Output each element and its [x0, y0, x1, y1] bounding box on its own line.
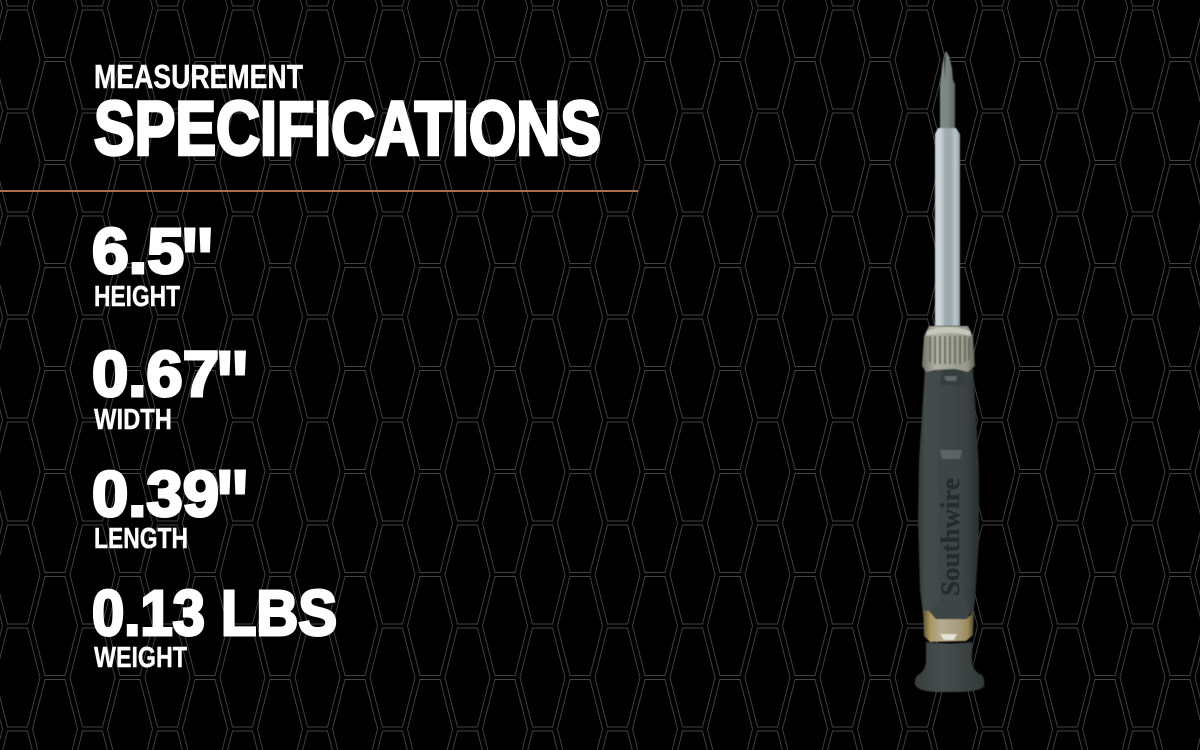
grip upper recess	[940, 367, 967, 385]
value: 6.5 inches: 6.5	[92, 215, 184, 287]
value: 0.67 inches	[92, 333, 250, 435]
spec: height	[92, 210, 215, 313]
heading: measurement: MEASUREMENT	[94, 58, 303, 95]
gold band glint	[940, 634, 957, 640]
collar	[922, 326, 975, 372]
grip upper highlight	[944, 376, 957, 381]
value: 0.67 inches: 0.67	[92, 338, 219, 410]
shaft	[935, 128, 960, 326]
title	[94, 58, 601, 172]
value: 0.39 inches	[92, 452, 250, 554]
collar rim	[926, 327, 971, 336]
gold band	[923, 610, 974, 642]
end cap	[915, 642, 984, 692]
grip panel highlight	[940, 450, 962, 459]
brand text: Southwire: Southwire	[936, 478, 965, 596]
grip	[918, 368, 979, 614]
spec: width	[92, 333, 250, 436]
label: height: HEIGHT	[94, 281, 180, 313]
screwdriver	[915, 51, 984, 692]
spec: weight	[92, 577, 337, 674]
label: weight: WEIGHT	[94, 642, 187, 674]
value: 0.39 inches: 0.39	[92, 458, 219, 530]
grip recessed panel	[925, 451, 971, 622]
value: 0.39 inches: "	[215, 452, 250, 554]
spec: length	[92, 452, 250, 555]
bit tip	[940, 51, 955, 129]
value: 0.13 lbs: 0.13 LBS	[92, 577, 337, 649]
divider line	[0, 190, 638, 192]
heading: specifications: SPECIFICATIONS	[94, 86, 601, 172]
collar ridges	[930, 336, 969, 364]
label: length: LENGTH	[94, 523, 188, 555]
value: 6.5 inches	[92, 210, 215, 312]
value: 6.5 inches: "	[180, 210, 215, 312]
bit notch	[944, 52, 946, 80]
label: width: WIDTH	[94, 404, 172, 436]
value: 0.67 inches: "	[215, 333, 250, 435]
